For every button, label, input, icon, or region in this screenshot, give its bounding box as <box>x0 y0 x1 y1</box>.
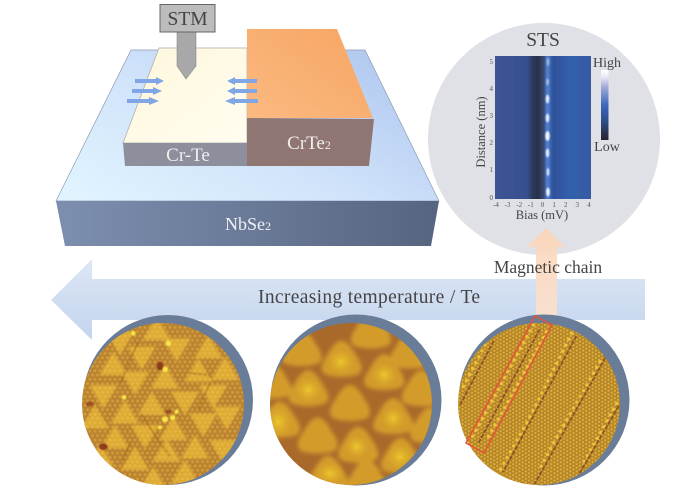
STM tip <box>160 4 215 79</box>
NbSe2 substrate: NbSe2 <box>225 214 271 234</box>
colour bar: High <box>593 56 621 71</box>
dark lines <box>460 330 618 483</box>
CrTe2 layer <box>247 29 374 166</box>
x axis ticks: -3 <box>505 201 511 209</box>
STM image 2: rounded triangular domains <box>270 314 442 486</box>
arrows: left edge, pointing right <box>127 77 164 105</box>
x axis ticks: 3 <box>576 201 580 209</box>
y axis ticks: 2 <box>490 139 494 147</box>
Cr-Te layer: Cr-Te <box>166 145 210 166</box>
x axis ticks: 2 <box>564 201 568 209</box>
x axis ticks: 0 <box>541 201 545 209</box>
x axis ticks: -1 <box>528 201 534 209</box>
label: magnetic chain: Magnetic chain <box>494 257 602 277</box>
STS circle panel <box>428 23 660 255</box>
x axis ticks: 4 <box>587 201 591 209</box>
y axis ticks: 0 <box>490 194 494 202</box>
Cr-Te layer <box>123 48 247 166</box>
x axis ticks: 1 <box>552 201 556 209</box>
colour bar <box>593 56 621 155</box>
red selection box <box>466 316 552 453</box>
arrow: magnetic chain up to STS <box>527 228 565 325</box>
STS heading: STS <box>526 30 560 51</box>
y axis ticks: 1 <box>490 166 494 174</box>
x axis ticks <box>493 201 591 209</box>
y axis ticks: 3 <box>490 112 494 120</box>
y axis ticks <box>490 58 494 202</box>
arrows: right edge, pointing left <box>225 77 258 105</box>
x axis ticks: -2 <box>516 201 523 209</box>
y axis label: Distance (nm) <box>474 96 488 168</box>
STM tip: STM <box>167 9 208 30</box>
bright chains <box>462 325 617 472</box>
STM image 3: magnetic chains <box>450 314 630 490</box>
y axis ticks: 4 <box>490 85 494 93</box>
NbSe2 substrate <box>56 50 439 246</box>
arrow: increasing temperature: Increasing temperature / Te <box>258 287 480 308</box>
panel: device schematic <box>56 4 439 246</box>
x axis ticks: -4 <box>493 201 499 209</box>
y axis ticks: 5 <box>490 58 494 66</box>
CrTe2 layer: CrTe2 <box>287 133 331 154</box>
STM image 1: triangular domains <box>80 315 253 490</box>
arrow: increasing temperature <box>51 259 645 340</box>
heatmap <box>495 56 591 199</box>
colour bar: Low <box>594 140 621 155</box>
x axis label: Bias (mV) <box>516 208 568 222</box>
